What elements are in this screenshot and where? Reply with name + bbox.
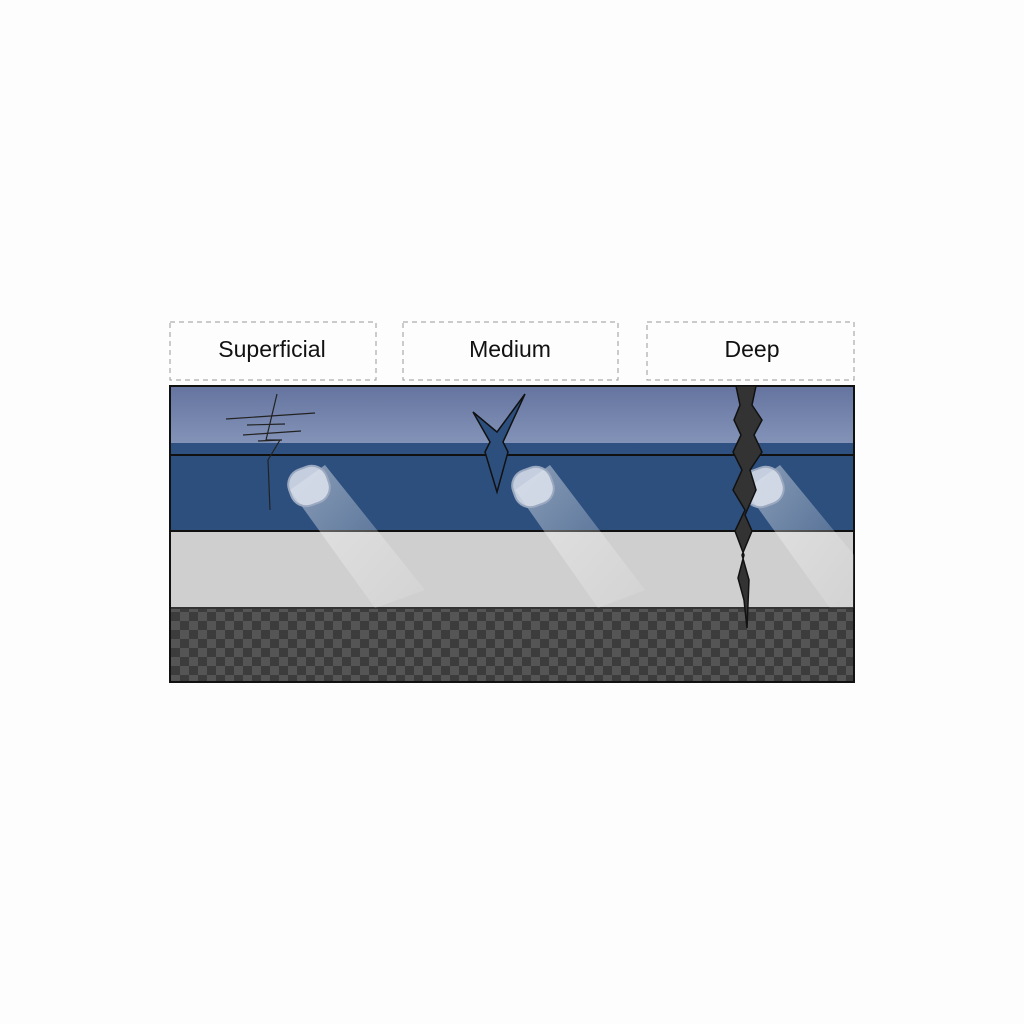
label: Deep: Deep xyxy=(725,336,779,362)
label: Medium: Medium xyxy=(469,336,551,362)
label: Superficial xyxy=(170,322,376,380)
label: Superficial: Superficial xyxy=(218,336,326,362)
layered cross-section xyxy=(170,386,854,682)
icon: medium V notch xyxy=(473,394,525,492)
light beams xyxy=(290,465,854,608)
icon: finger pads xyxy=(284,461,788,512)
label: Medium xyxy=(403,322,618,380)
icon: deep crack xyxy=(733,386,762,628)
icon: superficial scratch xyxy=(226,394,315,510)
label: Deep xyxy=(647,322,854,380)
label boxes xyxy=(170,322,854,380)
